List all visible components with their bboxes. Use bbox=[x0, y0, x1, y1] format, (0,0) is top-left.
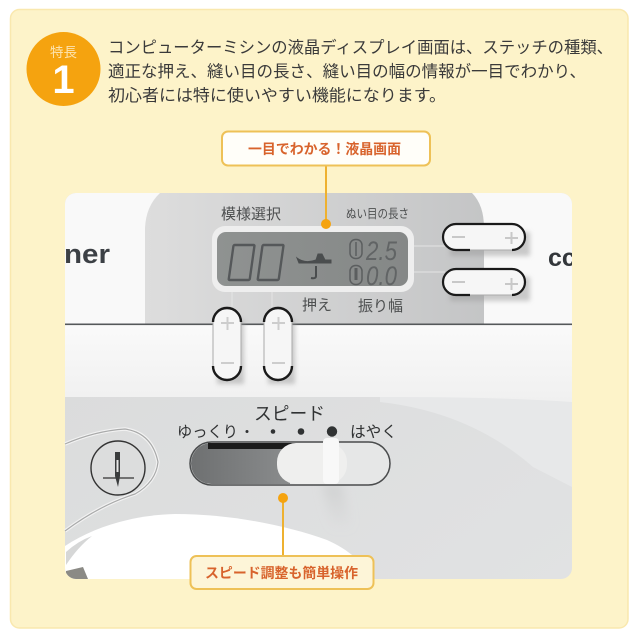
vertical buttons bbox=[213, 307, 295, 384]
lighter upper right area bbox=[380, 397, 570, 450]
bed corner shadow bbox=[66, 567, 88, 579]
badge: feature 1: 1 bbox=[52, 58, 75, 102]
text block: description bbox=[108, 38, 613, 105]
logo: right fragment: cc bbox=[548, 244, 576, 272]
speed slider bbox=[190, 438, 390, 485]
needle position button bbox=[65, 429, 158, 531]
speed labels: ゆっくり bbox=[177, 423, 238, 441]
logo: left fragment: ner bbox=[64, 239, 111, 269]
callout: LCD: 一目でわかる！液晶画面 bbox=[248, 141, 401, 157]
speed labels bbox=[177, 404, 397, 441]
white round bed bbox=[65, 514, 352, 579]
speed labels: スピード bbox=[254, 404, 325, 424]
LCD icons bbox=[350, 240, 362, 284]
band shadow line bbox=[65, 324, 572, 325]
panel labels: 押え bbox=[302, 297, 332, 314]
panel labels bbox=[221, 206, 409, 315]
panel labels: 振り幅 bbox=[358, 298, 403, 315]
text block: description: 適正な押え、縫い目の長さ、縫い目の幅の情報が一目でわかり、 bbox=[108, 63, 586, 81]
text block: description: コンピューターミシンの液晶ディスプレイ画面は、ステッチの種類、 bbox=[108, 38, 613, 57]
callout: speed: スピード調整も簡単操作 bbox=[205, 565, 358, 581]
LCD values: 2.5 bbox=[365, 236, 398, 266]
grey display panel bbox=[145, 193, 484, 324]
photo: sewing machine control panel bbox=[64, 193, 576, 582]
badge: feature 1 bbox=[26, 32, 100, 106]
horizontal buttons bbox=[443, 224, 530, 301]
LCD presser foot icon bbox=[297, 254, 331, 278]
LCD values bbox=[365, 236, 398, 291]
slider shadow bbox=[328, 486, 340, 502]
LCD display bbox=[212, 226, 414, 292]
middle white band bbox=[65, 325, 572, 402]
LCD digits: 00 bbox=[229, 245, 284, 280]
panel labels: 模様選択 bbox=[221, 206, 281, 223]
text block: description: 初心者には特に使いやすい機能になります。 bbox=[108, 87, 446, 105]
LCD values: 0.0 bbox=[366, 261, 397, 291]
light guide lines bbox=[232, 246, 445, 310]
callout: LCD bbox=[222, 132, 430, 229]
callout: speed bbox=[190, 493, 374, 589]
badge: feature 1: 特長 bbox=[50, 45, 77, 60]
upper white casing bbox=[65, 193, 572, 325]
panel labels: ぬい目の長さ bbox=[346, 207, 409, 221]
speed labels: はやく bbox=[350, 423, 397, 441]
bed swoosh bbox=[66, 536, 92, 565]
